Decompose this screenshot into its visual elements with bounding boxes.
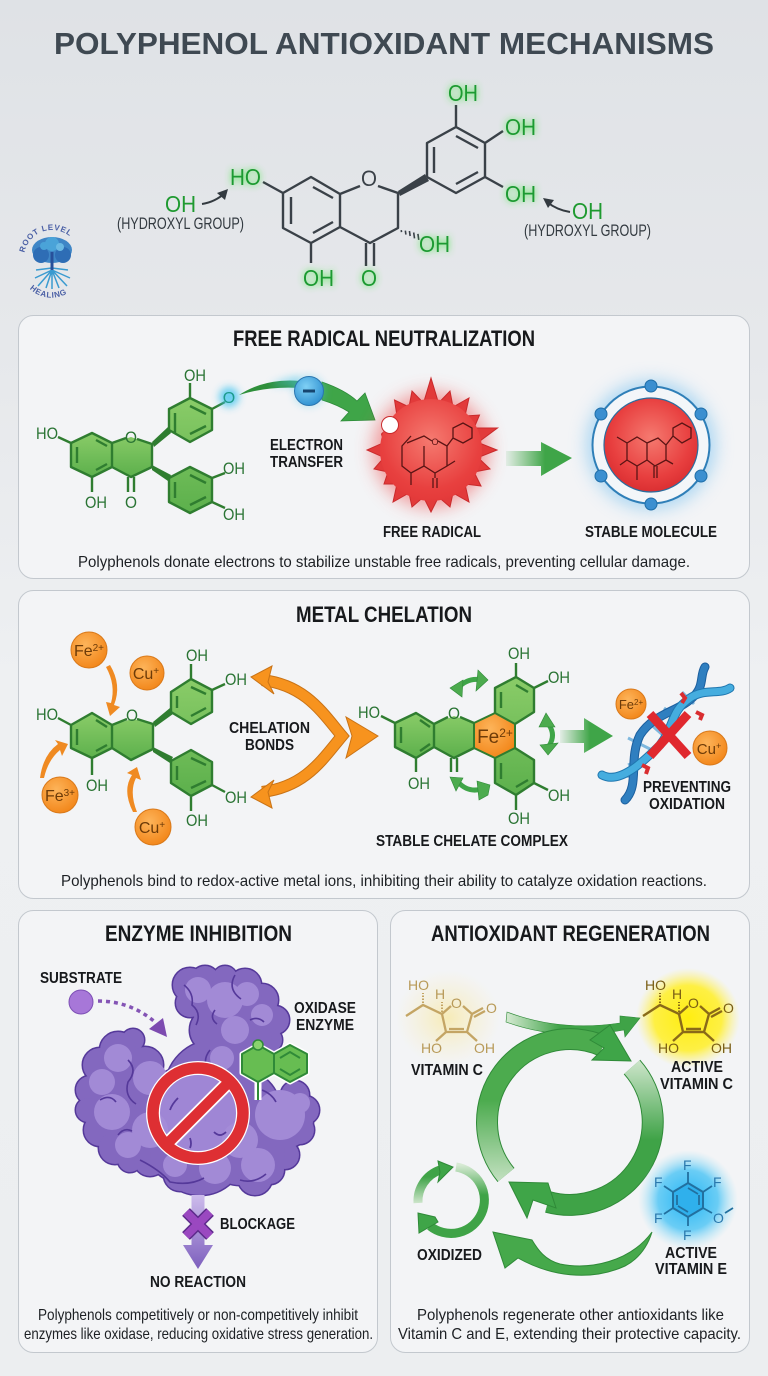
label: active vitamin C: VITAMIN C [660, 1076, 733, 1093]
molecule: vitamin C: HO [421, 1040, 442, 1056]
metal centre: Fe2+: Fe [477, 727, 499, 748]
ion: Cu+ bottom: Cu [139, 820, 159, 837]
molecule: active vitamin E: F [683, 1227, 692, 1243]
label: preventing oxidation [643, 779, 731, 813]
stable chelate complex: OH [508, 644, 530, 663]
molecule: active vitamin C: HO [645, 977, 666, 993]
molecule: vitamin C: HO [408, 977, 429, 993]
icon: prohibition sign [153, 1068, 243, 1158]
ion: Fe2+: Fe [74, 643, 93, 660]
glowing hydroxyl labels: OH [419, 231, 450, 257]
glowing hydroxyl labels: OH [448, 80, 478, 106]
molecule: active vitamin C: O [688, 995, 699, 1011]
ion: Fe2+: 2+ [93, 643, 104, 654]
heading: ANTIOXIDANT REGENERATION [431, 921, 710, 946]
icon: oxidase enzyme [76, 966, 319, 1195]
label: electron transfer [270, 437, 343, 471]
glowing hydroxyl labels: OH [303, 265, 334, 291]
glowing hydroxyl labels: HO [230, 164, 261, 190]
label: active vitamin C [660, 1059, 733, 1093]
ion: Cu+: + [716, 741, 721, 751]
stable chelate complex [358, 644, 570, 828]
green polyphenol molecule: HO [36, 424, 58, 443]
callout: hydroxyl group right: OH [572, 198, 603, 224]
metal ions with arrows [40, 632, 171, 845]
polyphenol molecule with metal ions: O [126, 706, 138, 725]
ion: Fe2+: Fe [619, 697, 634, 712]
caption: Polyphenols bind to redox-active metal ions, inhibiting their ability to catalyze oxidation reactions. [61, 873, 707, 890]
ion: Cu+ top: Cu [133, 666, 153, 683]
callout: hydroxyl group right [524, 198, 651, 240]
metal centre: Fe2+ [474, 713, 515, 758]
molecule: vitamin C: OH [474, 1040, 495, 1056]
arrow: main cycle right [509, 1067, 653, 1218]
arrow: electron transfer [239, 375, 375, 421]
logo: Root Level Healing: ROOT LEVEL [19, 224, 70, 252]
arrow: small oxidized cycle [418, 1161, 484, 1233]
label: stable molecule: STABLE MOLECULE [585, 524, 717, 541]
polyphenol molecule with metal ions: OH [225, 670, 247, 689]
molecule: active vitamin C: O [723, 1000, 734, 1016]
label: active vitamin C: ACTIVE [671, 1059, 723, 1076]
ion: Fe2+: 2+ [634, 698, 643, 707]
ion: Cu+ bottom [135, 809, 171, 845]
green polyphenol molecule: O [125, 428, 137, 447]
green polyphenol molecule: O [223, 390, 235, 407]
arrow: main cycle left [487, 1025, 631, 1175]
label: substrate: SUBSTRATE [40, 970, 122, 987]
callout: hydroxyl group left: OH [165, 191, 196, 217]
ion: Cu+ top: + [153, 666, 159, 677]
label: oxidized: OXIDIZED [417, 1247, 482, 1264]
glowing hydroxyl labels: O [361, 265, 377, 291]
molecule: active vitamin E [638, 1150, 738, 1250]
molecule: active vitamin E: F [654, 1210, 663, 1226]
ion: Fe3+: 3+ [64, 788, 75, 799]
caption: Vitamin C and E, extending their protective capacity. [398, 1326, 741, 1343]
arrow: regeneration top swoosh [506, 1012, 640, 1037]
label: chelation bonds [229, 720, 310, 754]
heading: ENZYME INHIBITION [105, 921, 292, 946]
ion: Cu+ [693, 731, 727, 765]
ion: Fe2+ [71, 632, 107, 668]
arrow: toward preventing oxidation [560, 718, 613, 753]
molecule: vitamin C: O [486, 1000, 497, 1016]
label: chelation bonds: BONDS [245, 737, 294, 754]
green polyphenol molecule: OH [223, 505, 245, 524]
green polyphenol molecule: OH [184, 366, 206, 385]
icon: stable molecule [587, 380, 715, 510]
caption: Polyphenols donate electrons to stabilize unstable free radicals, preventing cellular damage. [78, 554, 690, 571]
hero molecule: polyphenol with hydroxyl groups: O [361, 166, 377, 191]
callout: hydroxyl group right: (HYDROXYL GROUP) [524, 221, 651, 240]
label: oxidase enzyme: OXIDASE [294, 1000, 356, 1017]
polyphenol molecule with metal ions [36, 646, 247, 830]
arrow: blocked reaction [183, 1195, 213, 1269]
caption [398, 1307, 741, 1343]
icon: electron [293, 375, 325, 407]
glowing hydroxyl labels: OH [505, 181, 536, 207]
molecule: active vitamin E: F [683, 1157, 692, 1173]
logo: Root Level Healing [19, 224, 72, 298]
arrow: vitamin E to oxidized [493, 1232, 652, 1275]
panel: free radical neutralization [18, 316, 750, 578]
label: active vitamin E [655, 1245, 727, 1278]
callout: hydroxyl group left: (HYDROXYL GROUP) [117, 214, 244, 233]
label: free radical: FREE RADICAL [383, 524, 481, 541]
label: vitamin C: VITAMIN C [411, 1062, 483, 1079]
caption: enzymes like oxidase, reducing oxidative stress generation. [24, 1326, 373, 1343]
glowing hydroxyl labels: OH [505, 114, 536, 140]
label: active vitamin E: VITAMIN E [655, 1261, 727, 1278]
polyphenol molecule with metal ions: HO [36, 705, 58, 724]
label: chelation bonds: CHELATION [229, 720, 310, 737]
stable chelate complex: OH [508, 809, 530, 828]
metal centre: Fe2+: 2+ [499, 726, 513, 740]
green polyphenol molecule: OH [223, 459, 245, 478]
stable chelate complex: O [448, 704, 460, 723]
molecule: active vitamin C: HO [658, 1040, 679, 1056]
label: stable chelate complex: STABLE CHELATE COMPLEX [376, 833, 568, 850]
arrow: chelation bonds double arrow [251, 666, 378, 808]
molecule: active vitamin C: OH [711, 1040, 732, 1056]
panel: metal chelation [18, 590, 750, 898]
molecule: vitamin C: O [451, 995, 462, 1011]
label: electron transfer: ELECTRON [270, 437, 343, 454]
panel: antioxidant regeneration [390, 910, 750, 1352]
polyphenol molecule with metal ions: OH [86, 776, 108, 795]
glowing hydroxyl labels [230, 80, 536, 291]
polyphenol molecule with metal ions: OH [186, 811, 208, 830]
polyphenol molecule with metal ions: OH [225, 788, 247, 807]
caption: Polyphenols regenerate other antioxidants like [417, 1307, 724, 1324]
icon: polyphenol inhibitor [242, 1040, 307, 1100]
label: preventing oxidation: PREVENTING [643, 779, 731, 796]
ion: Cu+ top [130, 656, 164, 690]
label: blockage: BLOCKAGE [220, 1216, 295, 1233]
icon: free radical: O [431, 437, 439, 447]
small bond arrows [450, 670, 558, 800]
stable chelate complex: OH [548, 786, 570, 805]
heading: FREE RADICAL NEUTRALIZATION [233, 326, 535, 351]
arrow: to stable molecule [506, 442, 572, 476]
hero molecule: polyphenol with hydroxyl groups [230, 80, 536, 291]
green polyphenol molecule: OH [85, 493, 107, 512]
molecule: active vitamin E: F [654, 1174, 663, 1190]
panel: enzyme inhibition [18, 910, 378, 1352]
label: electron transfer: TRANSFER [270, 454, 343, 471]
heading: METAL CHELATION [296, 602, 472, 627]
stable chelate complex: OH [408, 774, 430, 793]
ion: Cu+ bottom: + [159, 820, 165, 831]
molecule: active vitamin C: H [672, 986, 682, 1002]
label: active vitamin E: ACTIVE [665, 1245, 717, 1262]
ion: Cu+: Cu [697, 741, 716, 758]
icon: substrate ball and dotted arrow [69, 990, 167, 1037]
callout: hydroxyl group left [117, 189, 244, 233]
ion: Fe2+ [616, 689, 646, 719]
molecule: active vitamin C [636, 968, 740, 1068]
caption: Polyphenols competitively or non-competitively inhibit [38, 1307, 358, 1324]
ion: Fe3+ [42, 777, 78, 813]
ion: Fe3+: Fe [45, 788, 64, 805]
molecule: vitamin C [396, 970, 500, 1066]
molecule: active vitamin E: F [713, 1174, 722, 1190]
label: oxidase enzyme [294, 1000, 356, 1034]
polyphenol molecule with metal ions: OH [186, 646, 208, 665]
molecule: active vitamin E: O [713, 1210, 724, 1226]
stable chelate complex: HO [358, 703, 380, 722]
label: no reaction: NO REACTION [150, 1274, 246, 1291]
label: preventing oxidation: OXIDATION [649, 796, 725, 813]
title: POLYPHENOL ANTIOXIDANT MECHANISMS [54, 26, 714, 61]
icon: DNA with red cross [602, 667, 730, 800]
icon: free radical [367, 378, 498, 512]
label: oxidase enzyme: ENZYME [296, 1017, 354, 1034]
molecule: vitamin C: H [435, 986, 445, 1002]
green polyphenol molecule [36, 366, 245, 524]
stable chelate complex: OH [548, 668, 570, 687]
logo: Root Level Healing: HEALING [30, 284, 66, 298]
green polyphenol molecule: O [125, 493, 137, 512]
caption [24, 1307, 373, 1343]
